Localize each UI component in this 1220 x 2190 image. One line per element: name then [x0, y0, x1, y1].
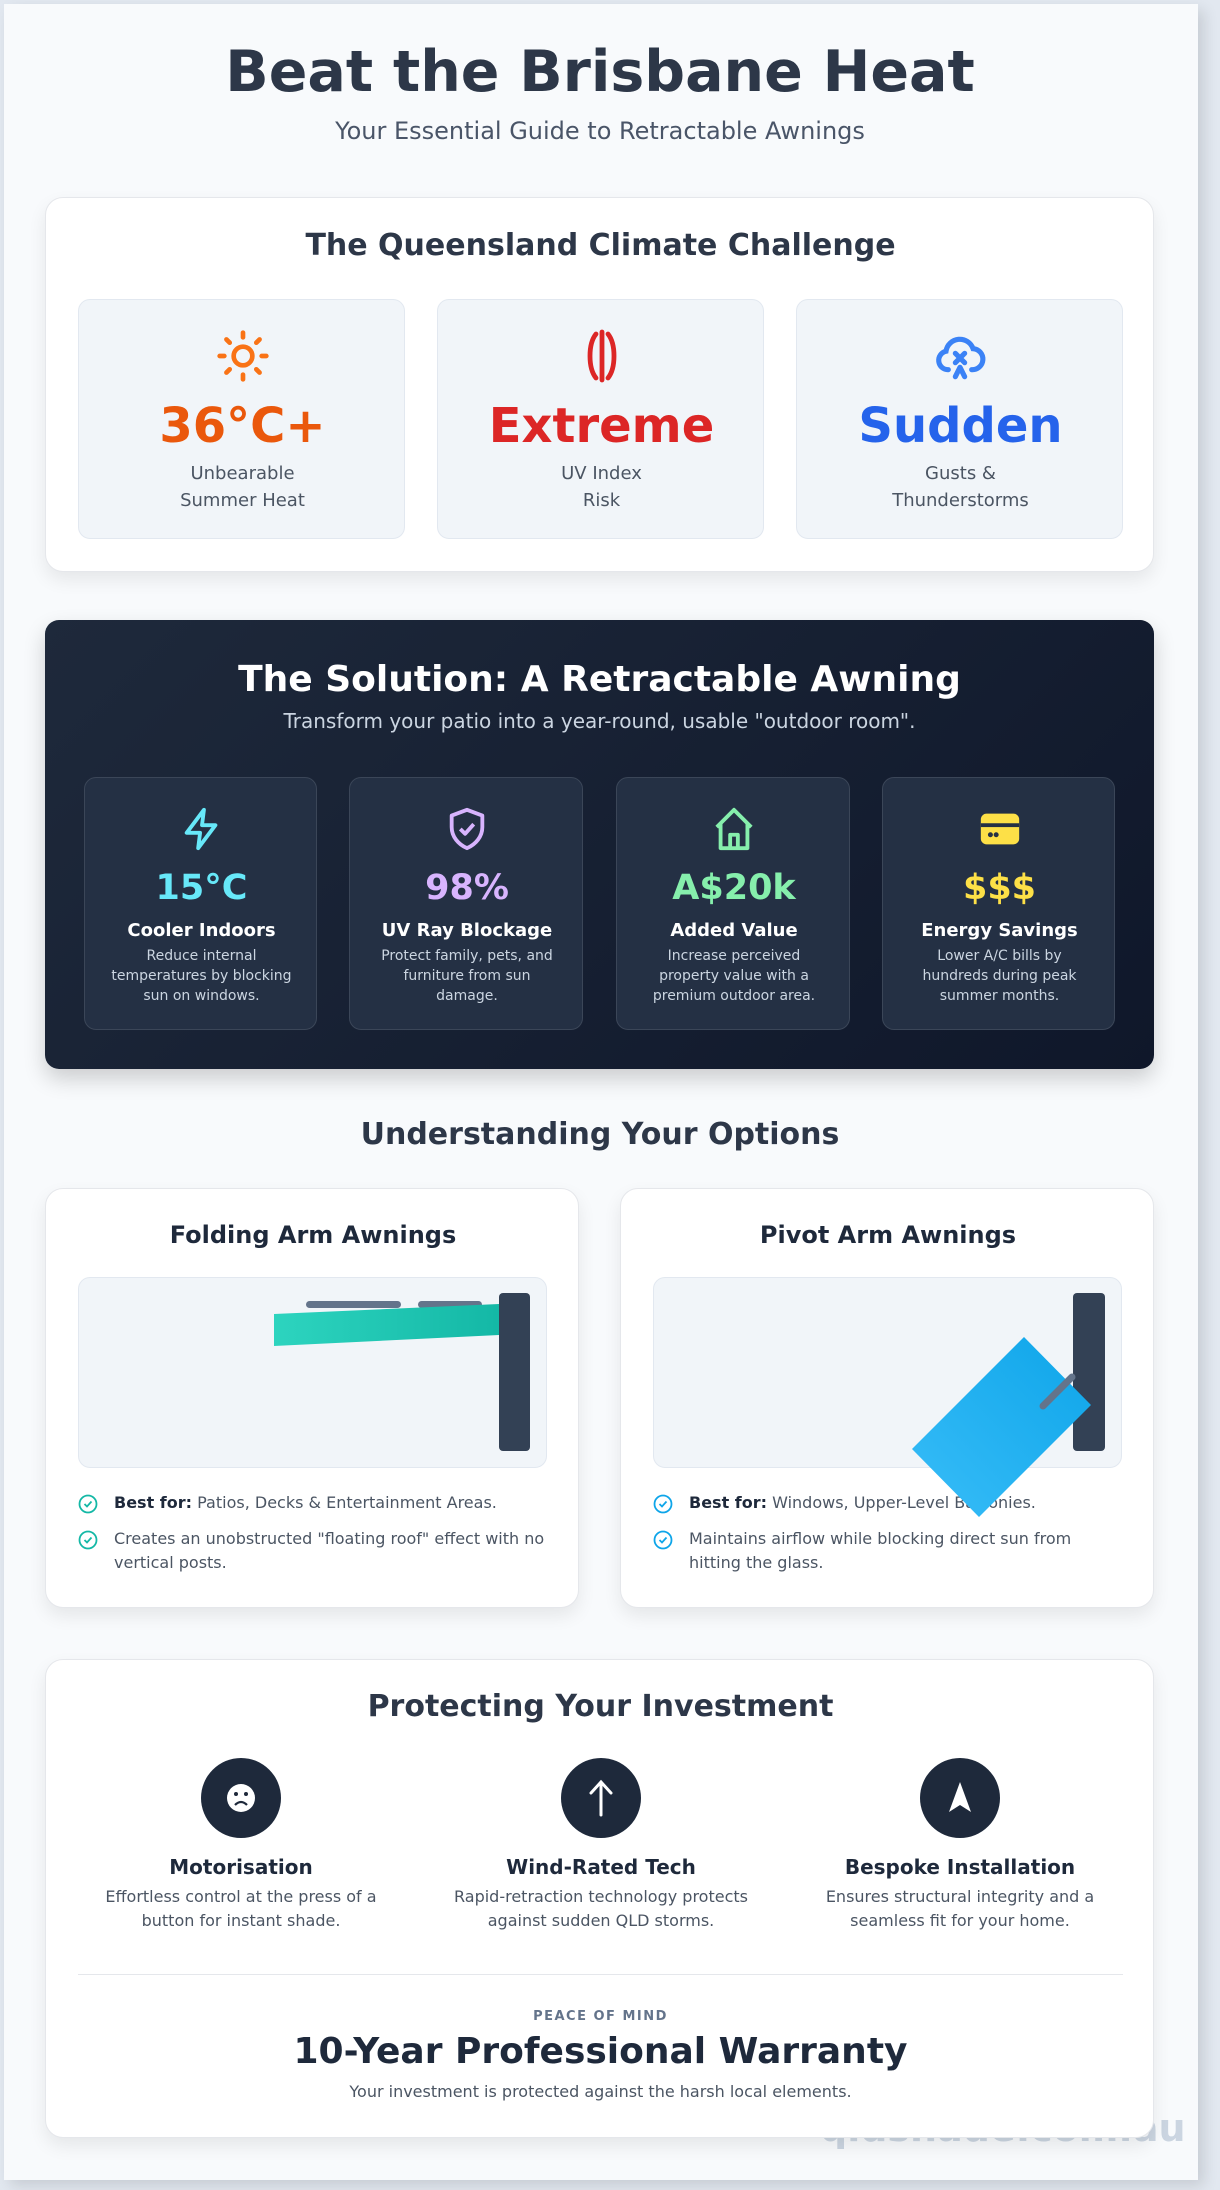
warranty — [293, 2009, 908, 2101]
panel: protecting investment — [45, 1659, 1154, 2138]
subheading: solution: Transform your patio into a year-round, usable "outdoor room". — [284, 709, 916, 733]
watermark: qldshade.com.au — [820, 2106, 1186, 2150]
bullets: folding: Creates an unobstructed "floating roof" effect with no vertical posts. — [114, 1529, 544, 1572]
icon: bolt — [184, 808, 218, 850]
panel: solution — [45, 620, 1154, 1069]
benefit: uv: UV Ray Blockage — [382, 920, 552, 941]
panel: climate challenge — [45, 197, 1154, 572]
stat: heat: 36°C+ — [159, 398, 326, 454]
benefit: energy: Energy Savings — [921, 920, 1078, 941]
icon: face — [201, 1758, 281, 1838]
feature: wind rated — [454, 1758, 748, 1930]
stat: heat: Unbearable — [190, 463, 295, 484]
heading: options: Understanding Your Options — [361, 1117, 839, 1152]
title: Beat the Brisbane Heat — [225, 39, 975, 105]
icon: sun — [217, 330, 269, 382]
panel: pivot arm — [620, 1188, 1154, 1608]
bullets: pivot: Best for: Windows, Upper-Level Balconies. — [689, 1493, 1036, 1512]
benefit: value: Added Value — [670, 920, 798, 941]
stat: uv: UV Index — [561, 463, 642, 484]
benefit: energy — [882, 777, 1115, 1030]
bullets: folding: Best for: Patios, Decks & Entertainment Areas. — [114, 1493, 497, 1512]
illustration shapes: folding awning — [274, 1293, 530, 1451]
stat: uv — [437, 299, 764, 539]
illustration shapes: pivot awning — [912, 1293, 1105, 1517]
bullets: pivot — [654, 1493, 1071, 1572]
stat: uv: Extreme — [489, 398, 714, 454]
feature: bespoke — [826, 1758, 1094, 1930]
icon: up arrow — [561, 1758, 641, 1838]
icon: shield — [450, 808, 484, 850]
benefit: uv — [349, 777, 583, 1030]
benefit: energy: $$$ — [963, 868, 1036, 908]
warranty: Your investment is protected against the harsh local elements. — [349, 2082, 852, 2101]
feature: motorisation — [105, 1758, 377, 1930]
icon: pointer — [920, 1758, 1000, 1838]
feature: motorisation: Motorisation — [169, 1855, 313, 1879]
subtitle: Your Essential Guide to Retractable Awnings — [335, 117, 865, 145]
warranty: PEACE OF MIND — [533, 2009, 668, 2024]
illustration: pivot — [653, 1277, 1122, 1468]
benefit: energy: Lower A/C bills by hundreds during peak summer months. — [922, 948, 1076, 1004]
panel: folding arm — [45, 1188, 579, 1608]
icon: card — [980, 814, 1020, 844]
feature: motorisation: Effortless control at the press of a button for instant shade. — [105, 1887, 377, 1930]
stat: heat: Summer Heat — [180, 490, 305, 511]
stat: storms: Gusts & — [925, 463, 996, 484]
benefit: value: Increase perceived property value with a premium outdoor area. — [653, 948, 815, 1004]
stat: uv: Risk — [583, 490, 620, 511]
heading: protecting: Protecting Your Investment — [368, 1689, 833, 1724]
feature: bespoke: Bespoke Installation — [845, 1855, 1075, 1879]
benefit: uv: Protect family, pets, and furniture from sun damage. — [381, 948, 553, 1004]
heading: folding: Folding Arm Awnings — [170, 1221, 456, 1249]
stat: storms — [796, 299, 1123, 539]
benefit: cooler: Cooler Indoors — [127, 920, 276, 941]
feature: bespoke: Ensures structural integrity and a seamless fit for your home. — [826, 1887, 1094, 1930]
icon: storm cloud — [936, 336, 986, 380]
heading: solution: The Solution: A Retractable Awning — [238, 659, 961, 700]
feature: wind rated: Rapid-retraction technology protects against sudden QLD storms. — [454, 1887, 748, 1930]
bullets: pivot: Maintains airflow while blocking direct sun from hitting the glass. — [689, 1529, 1071, 1572]
benefit: cooler: 15°C — [156, 868, 247, 908]
stat: storms: Thunderstorms — [892, 490, 1029, 511]
bullets: folding — [78, 1493, 544, 1572]
benefit: cooler — [84, 777, 317, 1030]
feature: wind rated: Wind-Rated Tech — [506, 1855, 696, 1879]
icon: house — [716, 808, 752, 850]
benefit: value: A$20k — [672, 868, 796, 908]
heading: climate: The Queensland Climate Challenge — [305, 228, 896, 263]
stat: storms: Sudden — [858, 398, 1063, 454]
stat: heat — [78, 299, 405, 539]
icon: uv — [588, 330, 616, 382]
heading: pivot: Pivot Arm Awnings — [760, 1221, 1016, 1249]
illustration: folding — [78, 1277, 547, 1468]
benefit: cooler: Reduce internal temperatures by blocking sun on windows. — [111, 948, 292, 1004]
benefit: value — [616, 777, 850, 1030]
benefit: uv: 98% — [425, 868, 509, 908]
warranty: 10-Year Professional Warranty — [293, 2031, 908, 2072]
